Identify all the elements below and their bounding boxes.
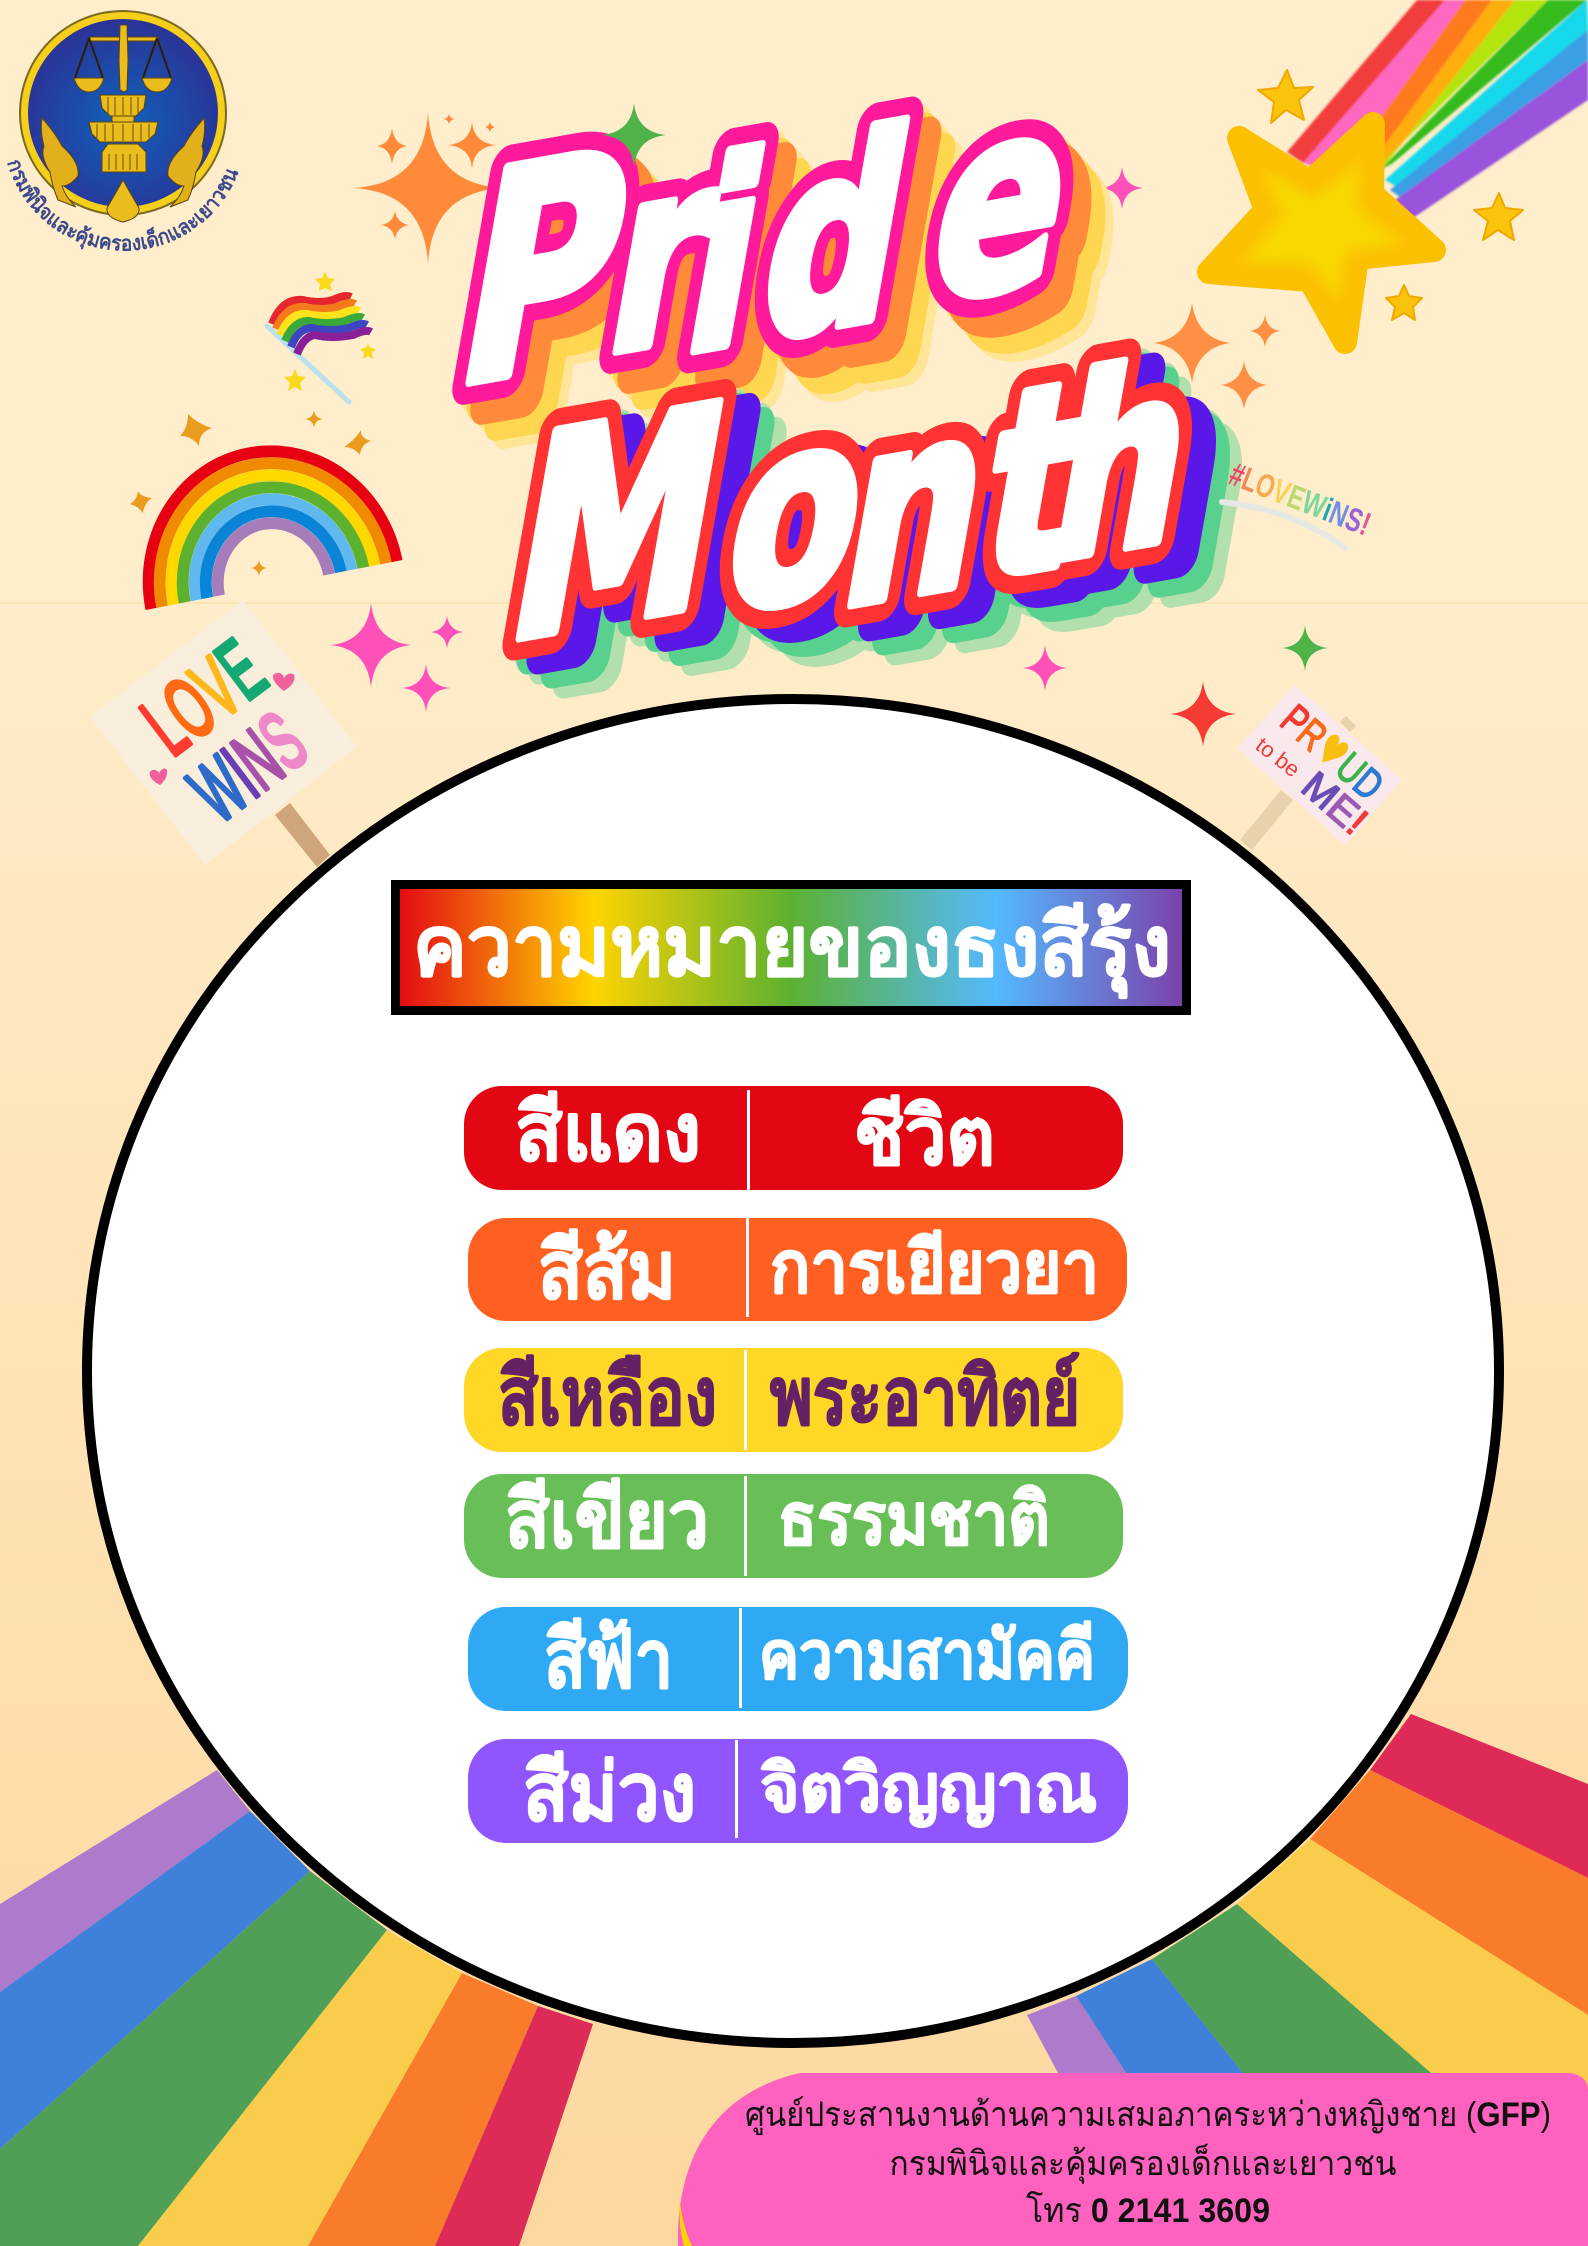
- pill: green: ธรรมชาติ: [778, 1480, 1050, 1560]
- title: Pride: P: [438, 87, 651, 455]
- pill: orange: [468, 1218, 1127, 1321]
- comet rainbow trail: [1287, 0, 1588, 218]
- sticker: #LOVEWINS!: #LOVEWiNS!: [1224, 456, 1375, 544]
- icon: pride flag: [267, 296, 371, 402]
- sign: love wins: WINS: [174, 695, 323, 840]
- pill: orange: สีส้ม: [538, 1226, 676, 1315]
- pill: red: สีแดง: [515, 1088, 701, 1177]
- title: Pride: e: [913, 35, 1094, 364]
- main white circle: [87, 699, 1499, 2043]
- title: Pride: [438, 8, 1098, 456]
- footer text: ศูนย์ประสานงานด้านความเสมอภาคระหว่างหญิงชาย (GFP): [745, 2096, 1551, 2135]
- title: Month: o: [707, 346, 890, 675]
- icon: orange sparkles top left: [353, 112, 503, 264]
- sign: proud to be me: PR♥UD: [1271, 694, 1394, 810]
- logo: naga left: [41, 118, 78, 207]
- title: Pride: d: [742, 72, 930, 402]
- icon: big yellow star: [1209, 124, 1434, 342]
- title: Month: M: [489, 342, 748, 707]
- title: Pride: r: [590, 93, 736, 416]
- logo: scales and sword: [74, 25, 172, 222]
- icon: rainbow arc: [126, 430, 397, 609]
- pill: blue: [468, 1607, 1128, 1711]
- icon: green sparkle top: [602, 103, 666, 167]
- pill: yellow: สีเหลือง: [498, 1352, 717, 1441]
- title: Month: [485, 259, 1221, 729]
- title: Pride: i: [667, 98, 785, 415]
- pill: yellow: [464, 1348, 1123, 1452]
- icon: pink sparkles: [331, 167, 1143, 712]
- footer panel: [678, 2073, 1588, 2246]
- heading bar: ความหมายของธงสีรุ้ง: [413, 899, 1171, 999]
- title: Pride: P: [438, 87, 651, 455]
- title: Month: n: [824, 340, 1011, 669]
- title: Month: t: [963, 320, 1107, 642]
- sign: love wins: LOVE: [125, 621, 282, 773]
- logo: [7, 10, 238, 251]
- sign: love wins: [90, 600, 357, 867]
- icon: gold sparkles around rainbow: [130, 410, 371, 576]
- title: Pride: r: [590, 93, 736, 416]
- pill: red: ชีวิต: [854, 1092, 995, 1181]
- pill: purple: จิตวิญญาณ: [760, 1751, 1097, 1827]
- pill: purple: สีม่วง: [523, 1748, 696, 1837]
- icon: green sparkle right: [1282, 625, 1328, 671]
- sign: proud to be me: to be: [1251, 732, 1305, 782]
- footer text: [745, 2096, 1551, 2230]
- title: Month: M: [489, 342, 748, 707]
- title: Pride: d: [742, 72, 930, 402]
- pill: blue: ความสามัคคี: [759, 1618, 1095, 1692]
- rainbow rays right: [1027, 1714, 1588, 2246]
- pill: green: สีเขียว: [505, 1475, 709, 1564]
- pill: blue: สีฟ้า: [544, 1615, 673, 1704]
- pill: yellow: พระอาทิตย์: [770, 1352, 1080, 1441]
- icon: orange sparkles right: [1154, 303, 1280, 409]
- title: Month: t: [963, 320, 1107, 642]
- pill: purple: [468, 1739, 1128, 1843]
- title: Month: h: [1034, 306, 1213, 621]
- title: Month: h: [1034, 306, 1213, 621]
- title: Month: n: [824, 340, 1011, 669]
- footer text: กรมพินิจและคุ้มครองเด็กและเยาวชน: [890, 2143, 1396, 2184]
- pill: red: [464, 1086, 1123, 1190]
- icon: small yellow stars: [1258, 70, 1523, 320]
- pill: orange: การเยียวยา: [770, 1228, 1099, 1308]
- sign: proud to be me: [1237, 685, 1402, 850]
- logo: department name: กรมพินิจและคุ้มครองเด็กและเยาวชน: [7, 160, 238, 251]
- title: Pride: i: [667, 98, 785, 415]
- rainbow rays left: [0, 1770, 593, 2246]
- pill: green: [464, 1474, 1123, 1578]
- sign: proud to be me: ME!: [1293, 764, 1376, 843]
- logo: naga right: [168, 118, 205, 207]
- footer text: โทร 0 2141 3609: [1026, 2191, 1270, 2230]
- icon: red sparkle: [1170, 681, 1236, 747]
- title: Month: o: [707, 346, 890, 675]
- title: Pride: e: [913, 35, 1094, 364]
- icon: yellow stars around flag: [284, 272, 376, 391]
